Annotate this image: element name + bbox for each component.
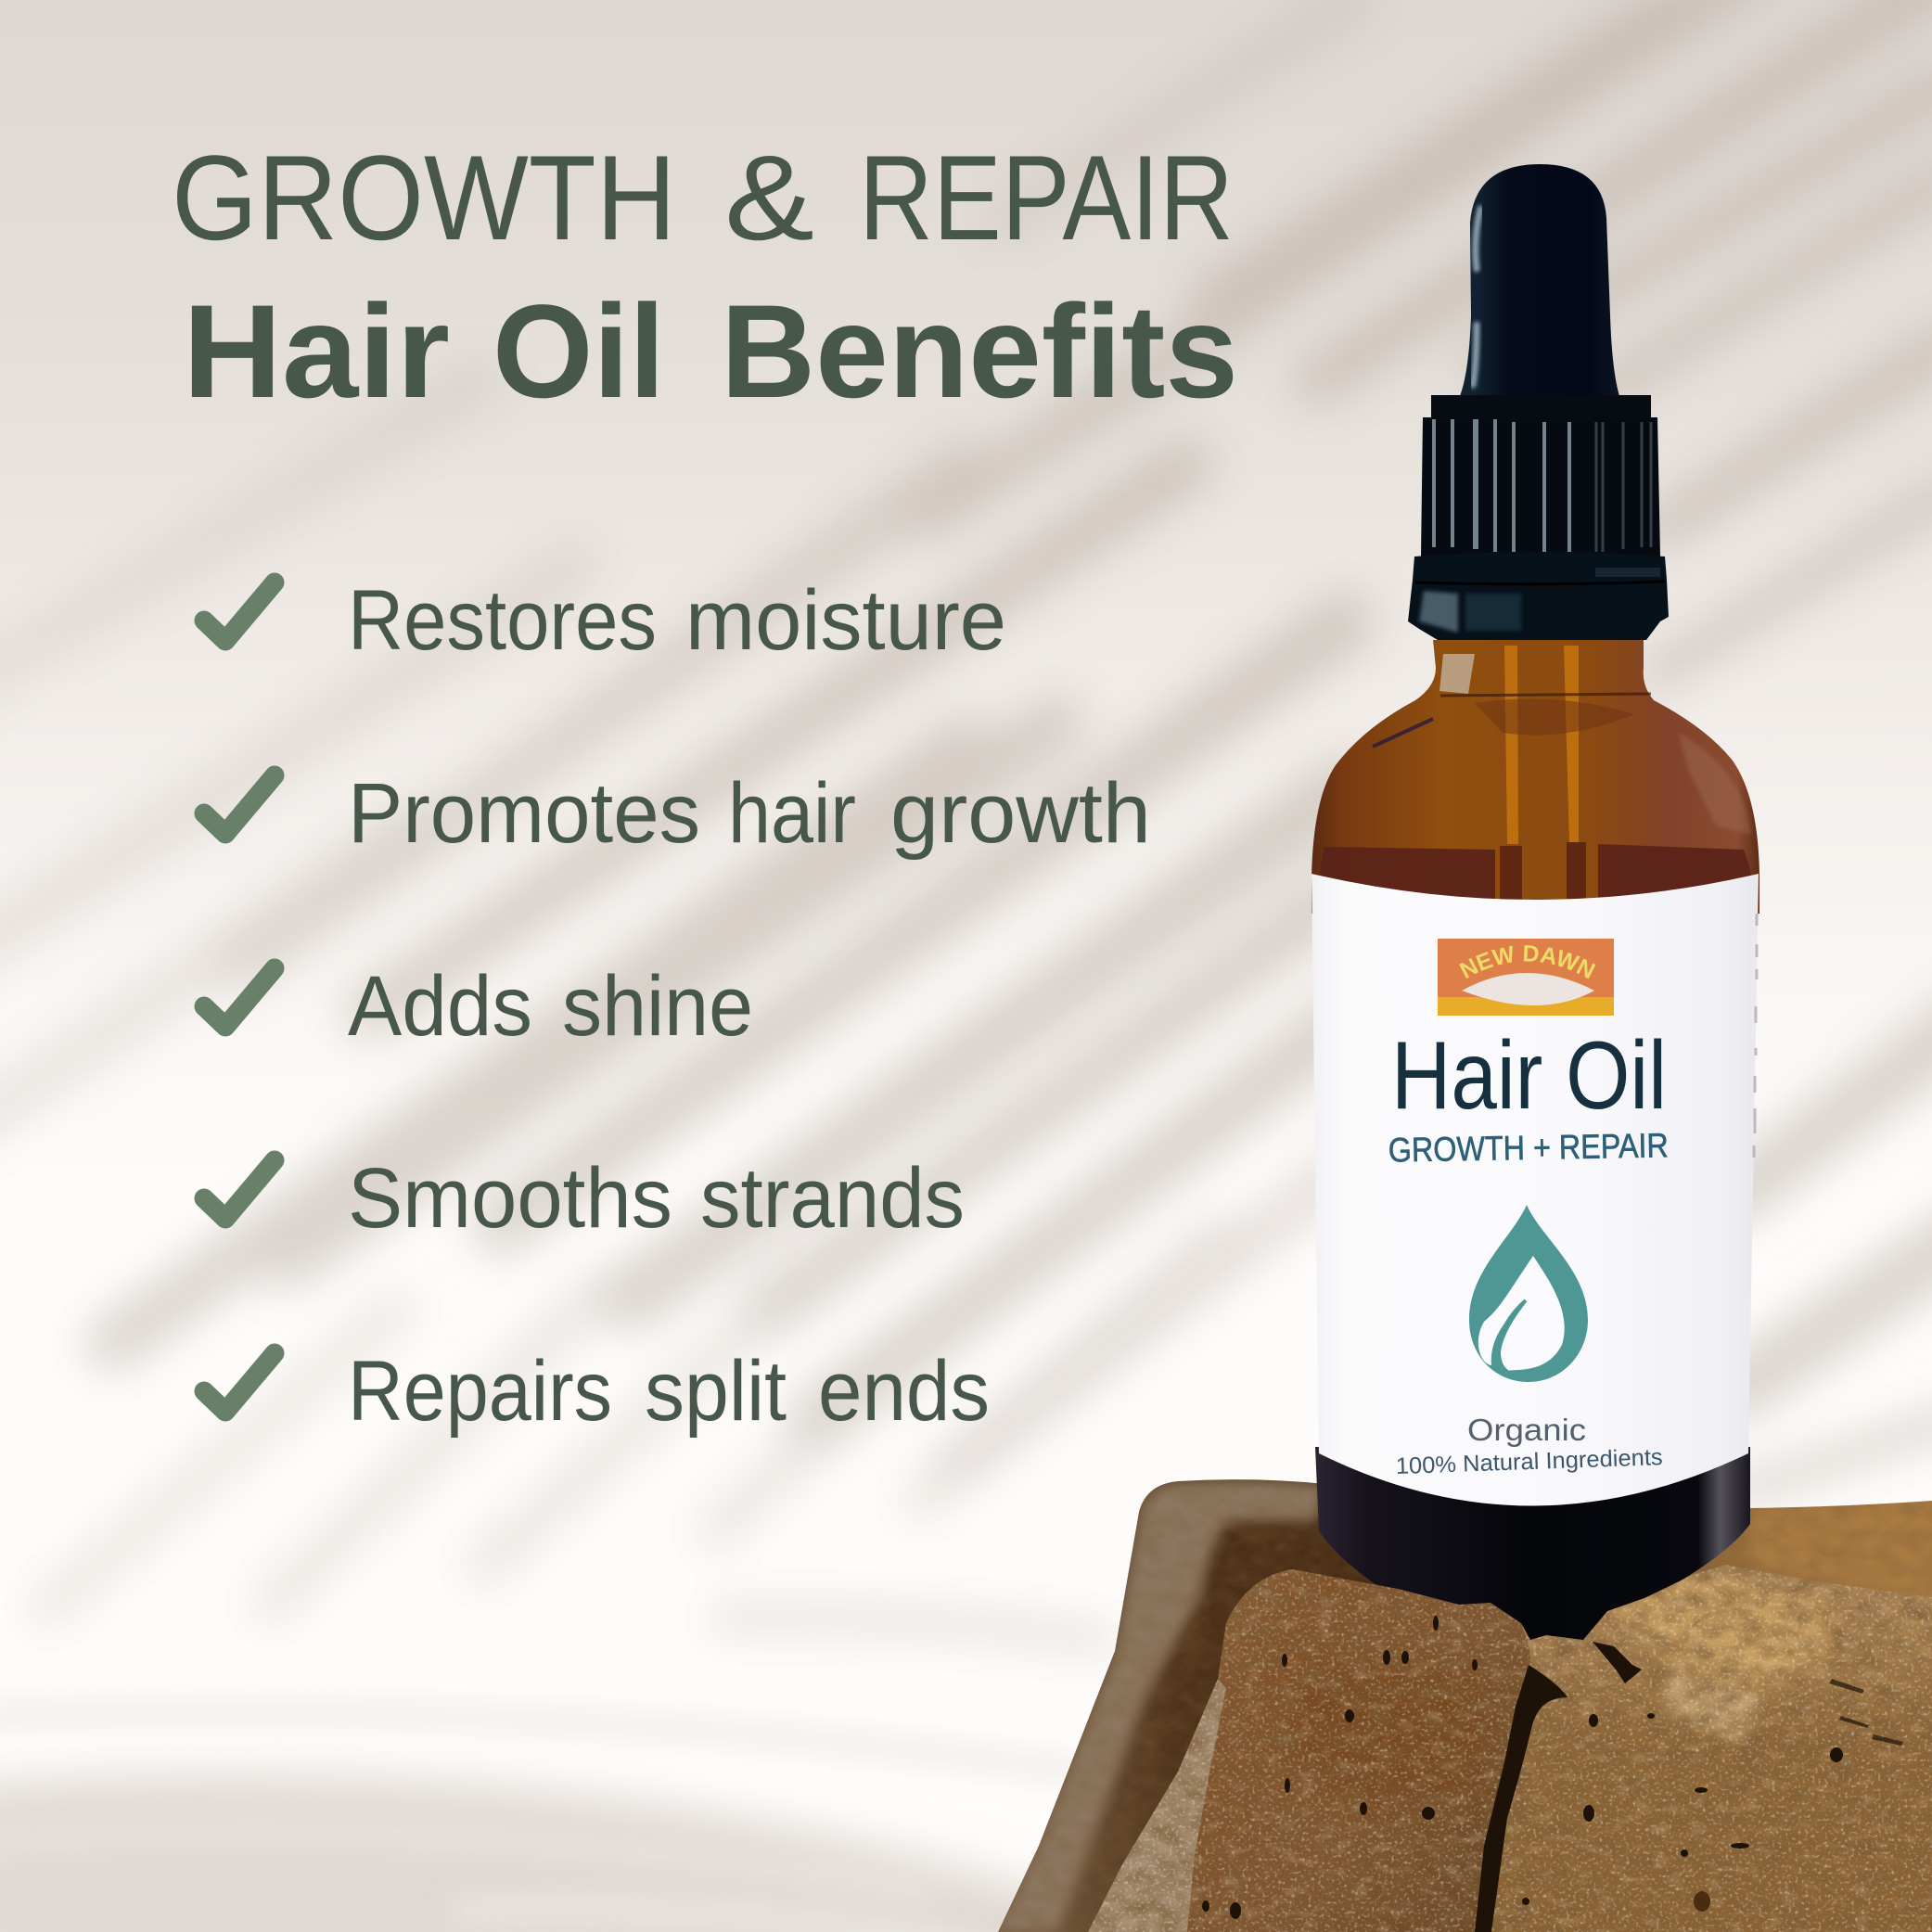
title line: hair oil benefits: Hair [183,278,450,426]
floor shadow bands [0,1712,1094,1932]
dropper bottle [1311,164,1759,1640]
amber glass shoulder [1311,640,1759,914]
item: smooths strands: Smooths [348,1151,672,1246]
item: restores moisture: Restores [348,573,657,668]
label: organic: Organic [1467,1413,1586,1447]
item: promotes hair growth: hair [728,766,856,861]
rock: crease and pits [1202,1616,1903,1932]
label edge text ticks [1754,914,1757,1158]
title line: growth and repair: & [724,130,814,265]
title line: hair oil benefits: Oil [493,278,665,426]
rock: back [998,1475,1932,1932]
cap lower ring [1408,552,1669,640]
title line: hair oil benefits: Benefits [721,278,1238,426]
label: product name: Hair Oil [1391,1022,1667,1130]
item: promotes hair growth: Promotes [348,766,700,861]
title line: growth and repair: GROWTH [172,130,676,265]
item: restores moisture [204,573,1006,668]
title line: growth and repair: REPAIR [859,130,1234,265]
dropper bulb [1460,164,1619,396]
item: repairs split ends: ends [818,1344,990,1439]
icon: teal drop with leaf [1469,1205,1588,1382]
rock: pale left side [1088,1679,1226,1932]
ribbed cap [1421,395,1660,557]
item: repairs split ends: Repairs [348,1344,612,1439]
title line: growth and repair [172,130,1234,265]
benefits list [204,573,1151,1439]
item: repairs split ends: split [645,1344,787,1439]
label: brand logo [1438,939,1614,1016]
rock: front [1088,1558,1932,1932]
bottle base glass [1315,1447,1750,1646]
item: smooths strands: strands [700,1151,965,1246]
item: promotes hair growth [204,766,1151,861]
white label [1311,874,1759,1506]
title line: hair oil benefits [183,278,1238,426]
item: promotes hair growth: growth [890,766,1151,861]
label: brand logo: NEW DAWN [1459,945,1595,979]
heading [172,130,1238,426]
label: growth + repair: GROWTH + REPAIR [1388,1126,1669,1170]
item: smooths strands [204,1151,965,1246]
item: adds shine [204,959,753,1054]
item: restores moisture: moisture [685,573,1006,668]
label: natural ingredients: 100% Natural Ingredients [1395,1444,1663,1479]
item: adds shine: shine [562,959,753,1054]
item: adds shine: Adds [348,959,532,1054]
item: repairs split ends [204,1344,990,1439]
